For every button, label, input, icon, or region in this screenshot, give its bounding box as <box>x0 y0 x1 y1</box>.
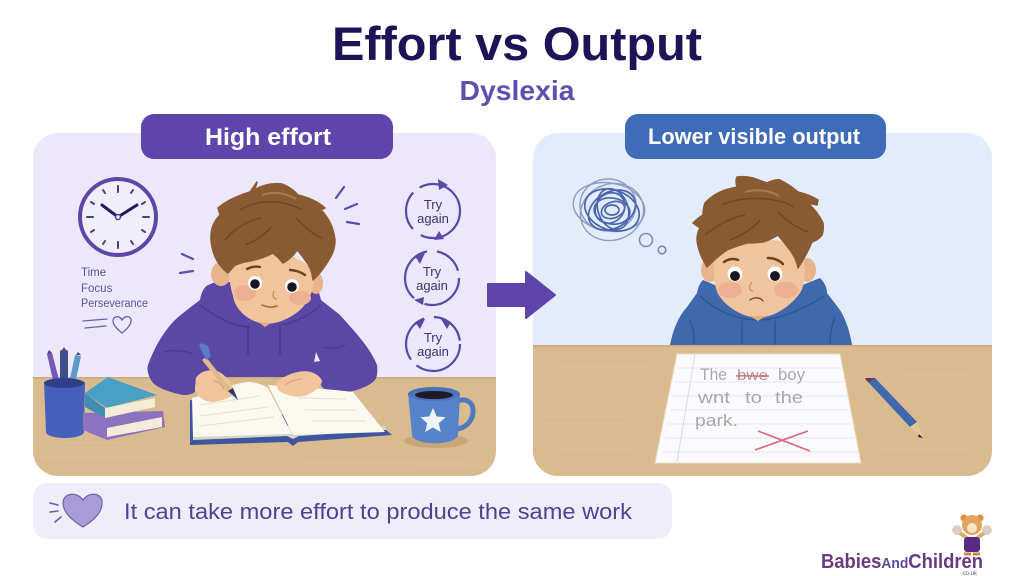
header pill: lower visible output: Lower visible output <box>648 124 861 149</box>
handwritten text <box>695 366 806 430</box>
cycle 1: Try <box>424 197 443 212</box>
text: time focus perseverance <box>81 267 148 310</box>
handwritten text: to <box>745 389 762 407</box>
face <box>714 240 805 318</box>
icon: stack of books <box>83 377 165 440</box>
icon: heart with lines <box>50 494 102 527</box>
eyes <box>728 266 742 282</box>
hair <box>211 182 335 280</box>
panel: high effort <box>33 133 496 476</box>
cycle 2: again <box>416 278 448 293</box>
icon: coffee mug with star <box>404 387 473 448</box>
text: time focus perseverance: Focus <box>81 283 113 295</box>
handwritten text: The <box>700 366 727 384</box>
worksheet paper <box>655 354 861 463</box>
icon: scribble thought <box>569 175 666 254</box>
try again cycles <box>405 179 460 371</box>
panel: lower visible output <box>533 133 992 476</box>
callout text: It can take more effort to produce the same work <box>124 499 633 524</box>
hoodie <box>670 278 852 345</box>
motion dashes <box>180 187 359 273</box>
text: time focus perseverance: Perseverance <box>81 298 148 310</box>
handwritten text: the <box>775 389 803 407</box>
header pill: high effort: High effort <box>205 124 331 151</box>
cycle 2 <box>405 251 459 305</box>
ears <box>701 258 719 282</box>
callout bar <box>33 483 672 539</box>
cycle 3 <box>406 317 460 371</box>
logo mascot <box>952 514 992 554</box>
handwritten text: park. <box>695 412 738 430</box>
cycle 1: again <box>417 211 449 226</box>
handwritten text: boy <box>778 366 806 384</box>
icon: pencil <box>865 378 923 438</box>
boy writing <box>148 182 377 395</box>
icon: small heart with lines <box>83 317 131 333</box>
title: Effort vs Output <box>332 17 702 70</box>
open notebook <box>190 382 392 446</box>
arrow <box>488 272 555 318</box>
logo <box>821 514 992 576</box>
handwritten text: bwe <box>737 367 768 384</box>
cycle 3: again <box>417 344 449 359</box>
ears <box>211 262 231 286</box>
logo wordmark: BabiesAndChildren <box>821 551 983 573</box>
hoodie <box>148 281 377 395</box>
cycle 2: Try <box>423 264 442 279</box>
handwritten text: wnt <box>697 389 731 407</box>
boy looking down <box>670 177 852 345</box>
hands and pen <box>195 343 322 402</box>
icon: pen cup <box>44 347 85 438</box>
header pill: lower visible output <box>625 114 886 159</box>
red cross <box>755 431 810 451</box>
eyes <box>248 276 262 290</box>
face <box>229 253 314 324</box>
red strike <box>736 375 769 377</box>
cycle 1 <box>406 179 460 240</box>
header pill: high effort <box>141 114 393 159</box>
cycle 3: Try <box>424 330 443 345</box>
subtitle: Dyslexia <box>460 75 575 106</box>
hair <box>693 177 823 268</box>
text: time focus perseverance: Time <box>81 267 106 279</box>
icon: clock <box>80 179 156 255</box>
panel background <box>33 133 496 476</box>
panel background <box>533 133 992 476</box>
